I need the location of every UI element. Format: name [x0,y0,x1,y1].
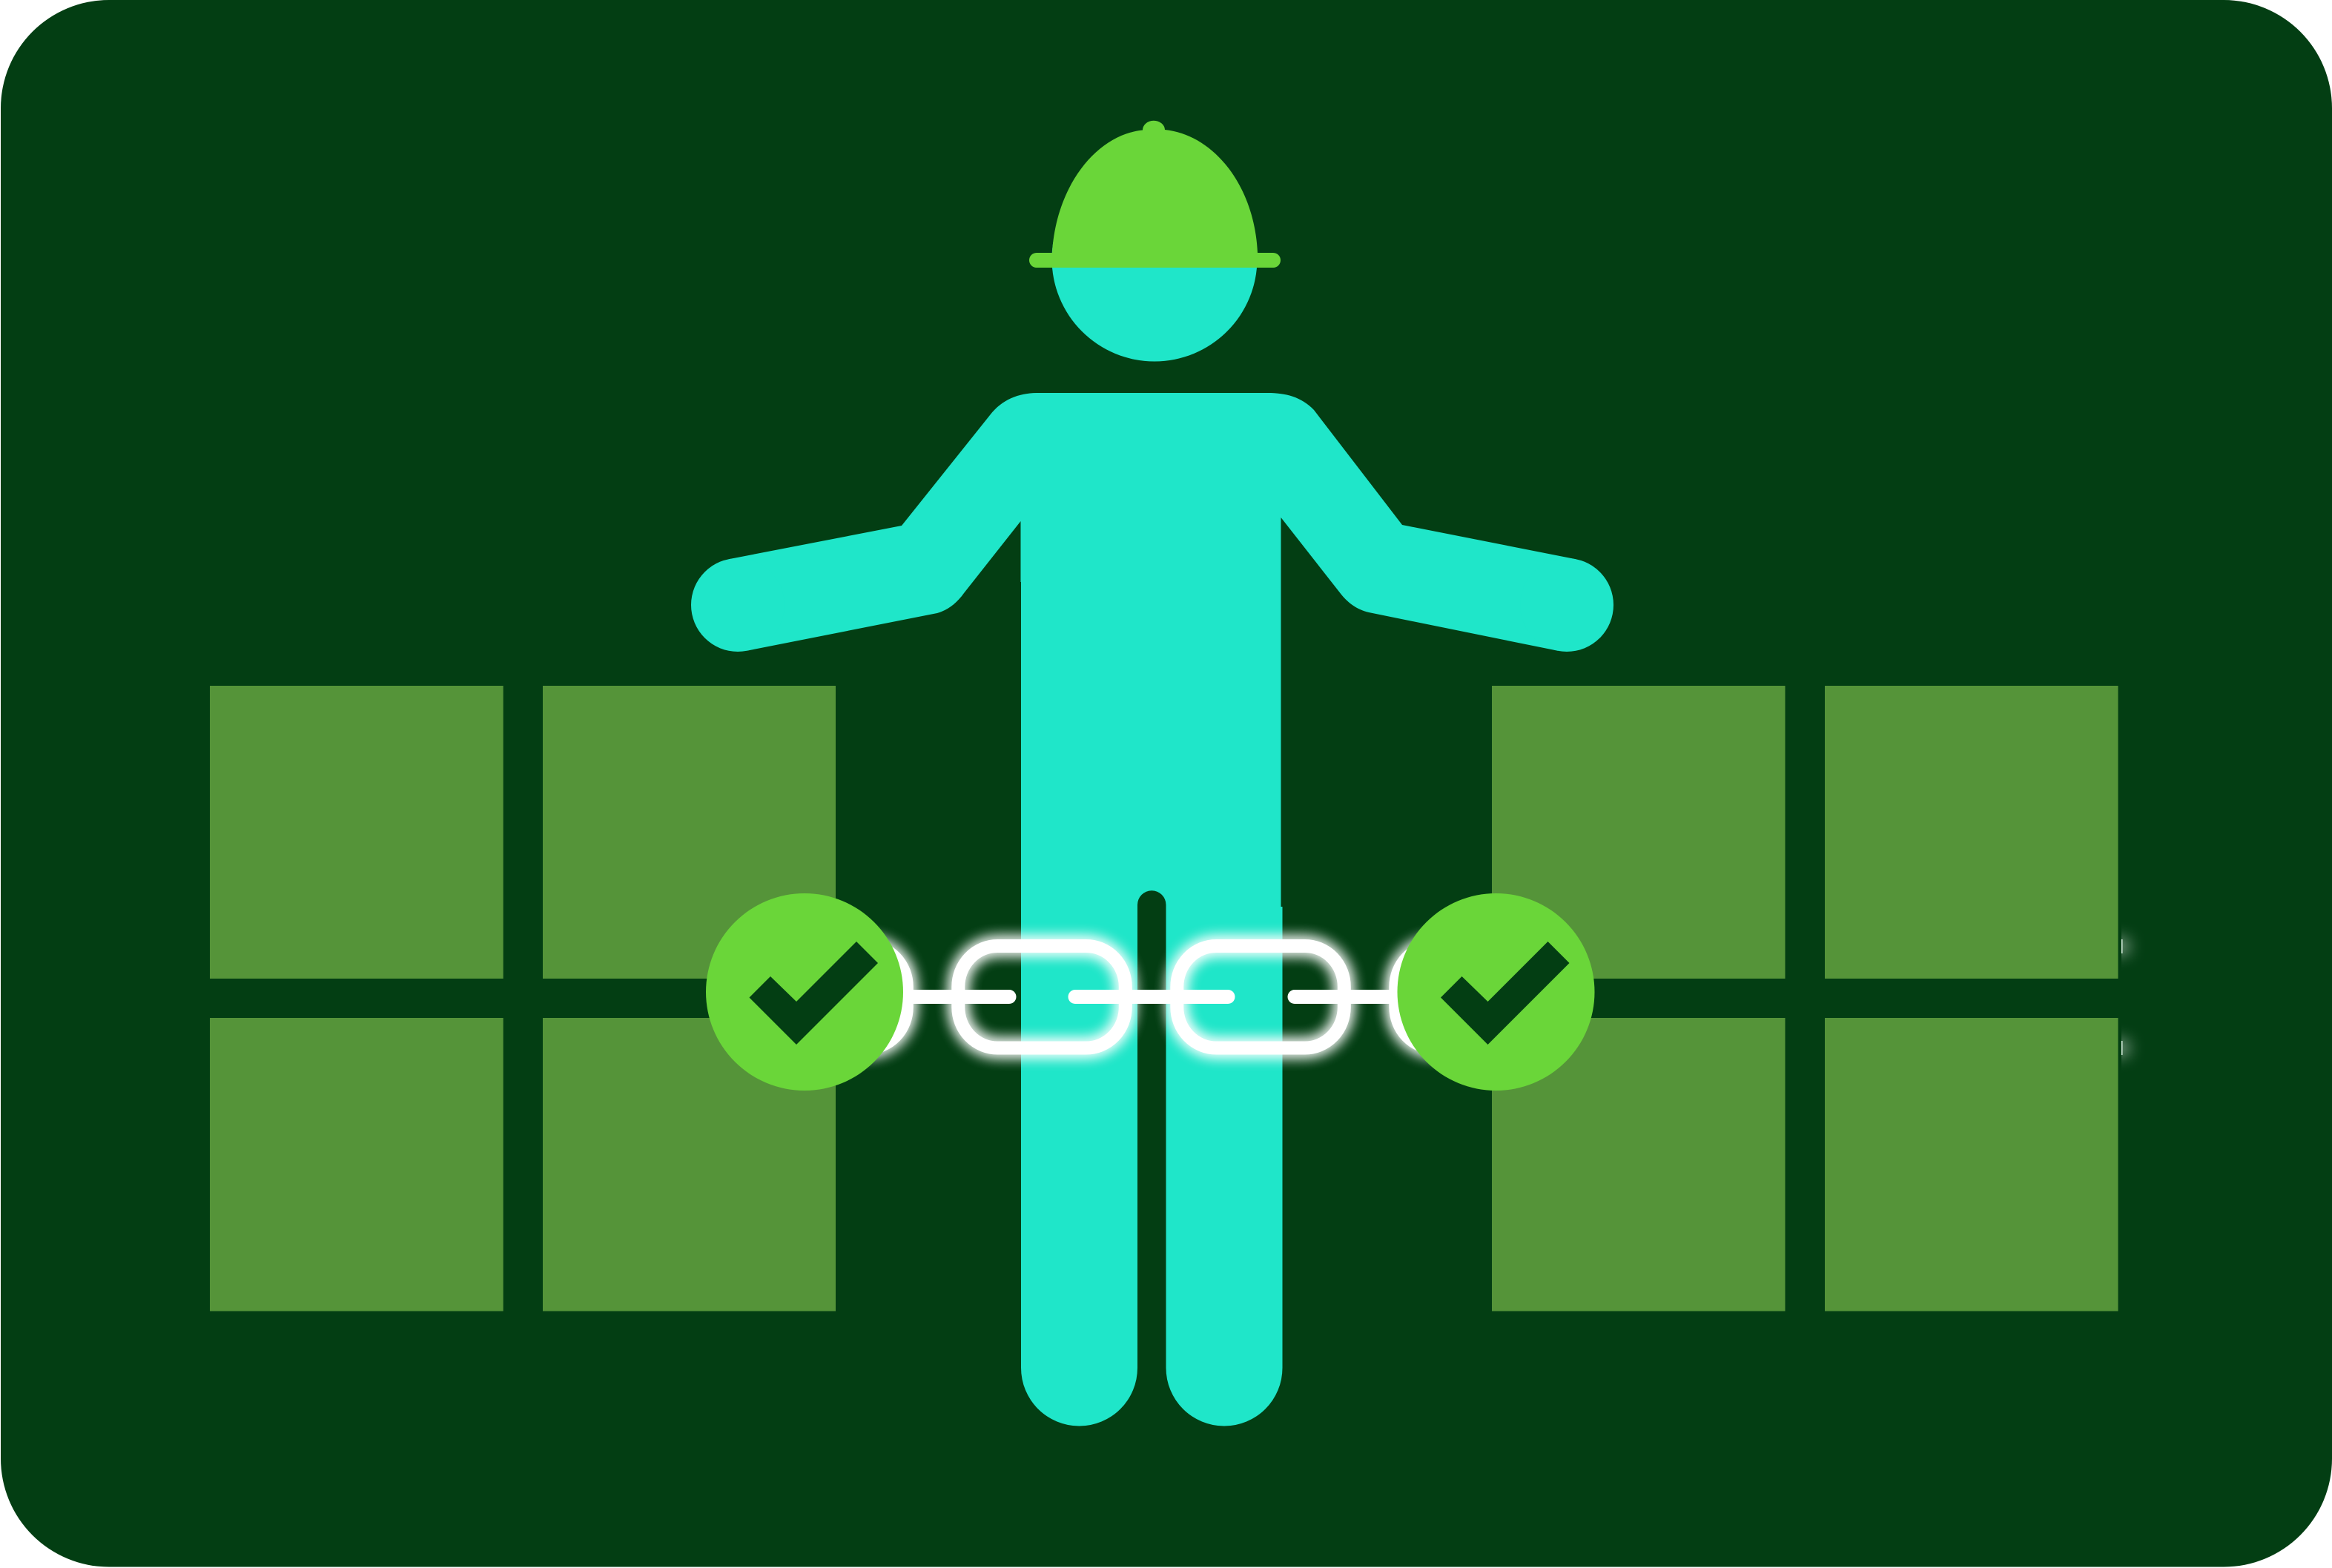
chain links [739,946,1563,1048]
tile grid: left [210,686,836,1311]
connecting bars [816,990,1490,1004]
worker figure [691,121,1613,1426]
worker body and arms [691,393,1613,1426]
glowing link outlines [739,946,1563,1048]
check badge: right [1397,893,1594,1091]
worker head [1051,156,1258,362]
hard hat [1029,121,1281,268]
clipped chain remnants at right edge [2121,928,2138,1066]
check badge: left [706,893,903,1091]
tile grid: right [1492,686,2118,1311]
